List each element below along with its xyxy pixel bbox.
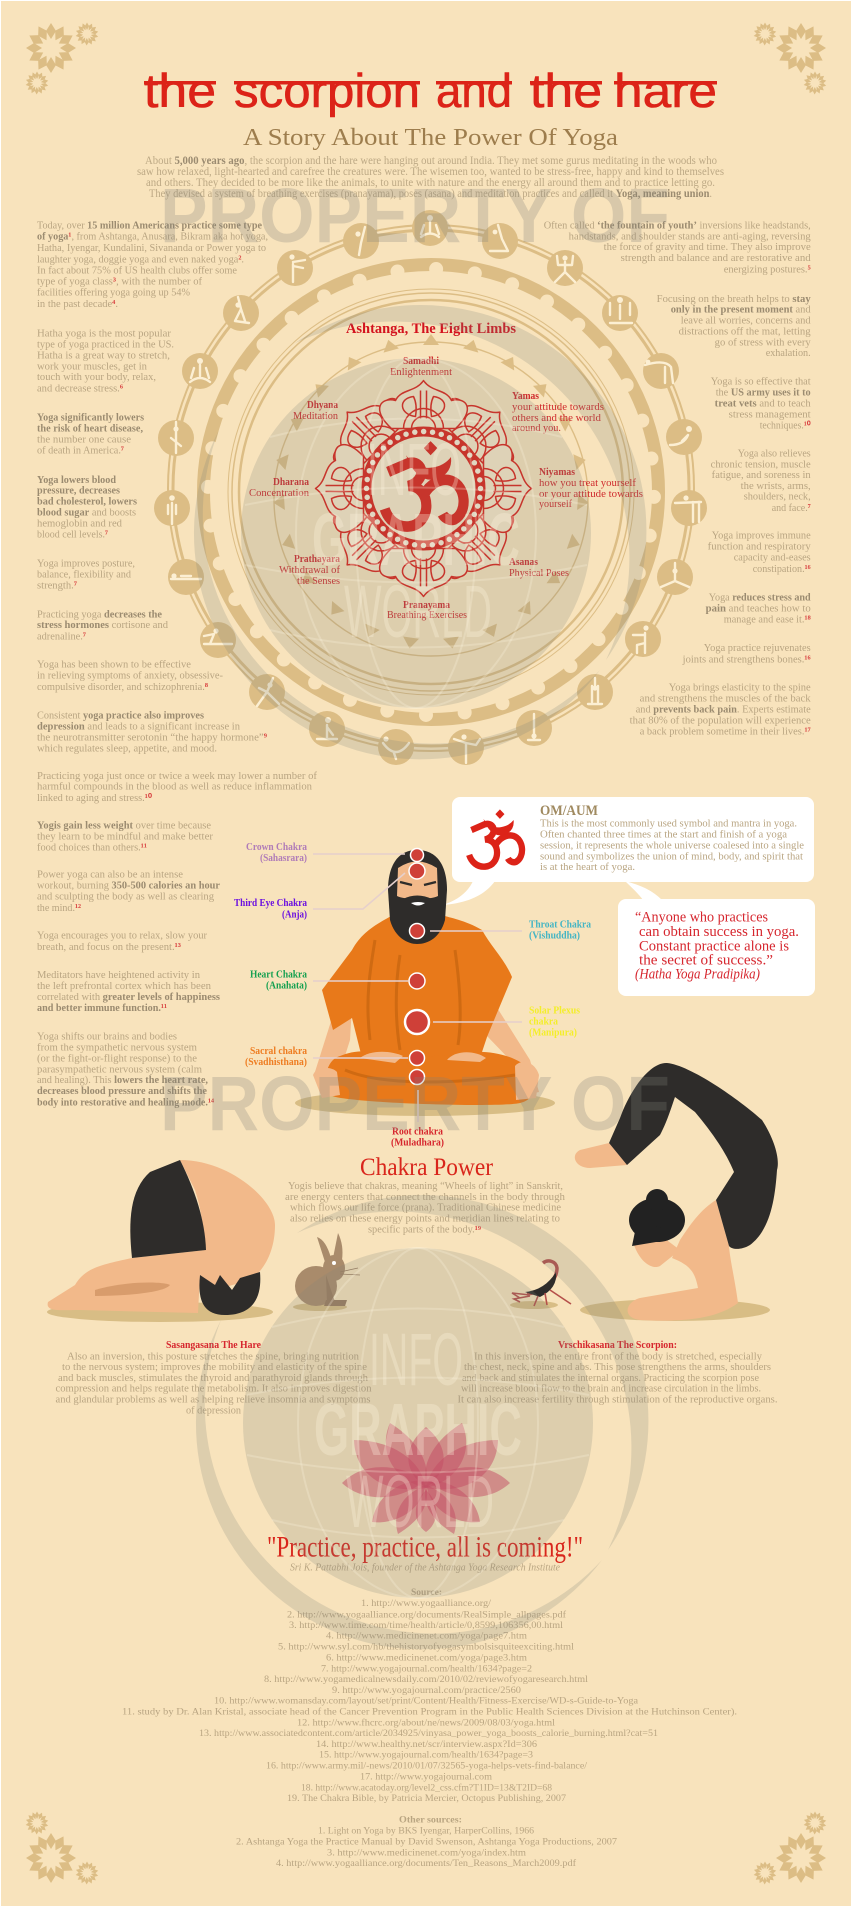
other sources list xyxy=(236,1815,617,1869)
right column: facts: energizing postures.⁵ xyxy=(724,264,811,275)
chakra labels: Heart Chakra xyxy=(250,969,308,980)
icon: corner flowers bottom right xyxy=(753,1812,827,1885)
right column: facts: joints and strengthens bones.¹⁶ xyxy=(682,655,811,666)
callout: hatha yoga quote: “Anyone who practices xyxy=(635,910,768,926)
left column: facts: Yoga improves posture, xyxy=(37,559,135,570)
left column: facts: bad cholesterol, lowers xyxy=(37,497,137,508)
right column: facts: distractions off the mat, letting xyxy=(679,326,811,337)
left column: facts: Yoga lowers blood xyxy=(37,475,116,486)
callout: hatha yoga quote xyxy=(618,881,815,996)
title xyxy=(144,64,717,117)
sources list: 5. http://www.syl.com/hb/thehistoryofyogasymbolsisquiteexciting.html xyxy=(278,1642,574,1653)
right column: facts: Yoga reduces stress and xyxy=(709,592,811,603)
sources list: 7. http://www.yogajournal.com/health/1634?page=2 xyxy=(321,1663,532,1674)
chakra labels: Solar Plexus xyxy=(529,1006,580,1017)
title: scorpion xyxy=(234,64,420,117)
sources list: 4. http://www.medicinenet.com/yoga/page7.htm xyxy=(326,1631,527,1642)
callout: hatha yoga quote: the secret of success.” xyxy=(639,952,773,968)
left column: facts: Today, over 15 million Americans practice some type xyxy=(37,221,262,232)
watermark: lower: INFO xyxy=(369,1318,463,1401)
watermark: upper: GRAPHIC xyxy=(312,498,520,581)
sources list: 19. The Chakra Bible, by Patricia Mercier, Octopus Publishing, 2007 xyxy=(287,1793,566,1804)
labels: eight limbs: Niyamas xyxy=(539,467,575,478)
chakra labels: (Manipura) xyxy=(529,1028,577,1039)
chakra labels: Third Eye Chakra xyxy=(234,898,308,909)
left column: facts xyxy=(37,221,317,1109)
icon: lotus flower xyxy=(342,1423,510,1534)
left column: facts: workout, burning 350-500 calories an hour xyxy=(37,881,220,892)
chakra labels: Sacral chakra xyxy=(250,1046,308,1057)
callout: om speech bubble: session, it represents the whole universe coalesed into a single xyxy=(540,840,804,851)
caption: scorpion pose xyxy=(458,1340,778,1406)
other sources list: 3. http://www.medicinenet.com/yoga/index.htm xyxy=(327,1847,526,1858)
sources list: 16. http://www.army.mil/-news/2010/01/07/32565-yoga-helps-vets-find-balance/ xyxy=(266,1761,587,1772)
chakra labels: Root chakra xyxy=(392,1127,444,1138)
labels: eight limbs: Pranayama xyxy=(403,600,451,611)
sources list: 17. http://www.yogajournal.com xyxy=(360,1772,492,1783)
chakra leader lines xyxy=(313,854,522,1122)
left column: facts: hemoglobin and red xyxy=(37,519,123,530)
labels: eight limbs: the Senses xyxy=(297,576,340,587)
left column: facts: facilities offering yoga going up 54% xyxy=(37,288,190,299)
chakra labels: Throat Chakra xyxy=(529,920,592,931)
mandala with om xyxy=(316,380,532,596)
left column: facts: of death in America.⁷ xyxy=(37,446,124,457)
icon: corner flowers bottom left xyxy=(25,1812,99,1885)
right column: facts: Yoga practice rejuvenates xyxy=(704,643,811,654)
other sources list: 4. http://www.yogaalliance.org/documents/Ten_Reasons_March2009.pdf xyxy=(276,1858,577,1869)
text block: chakra power: which flows our life force (prana). Traditional Chinese medicine xyxy=(290,1203,562,1214)
left column: facts: they learn to be mindful and make better xyxy=(37,831,214,842)
chakra labels: (Anahata) xyxy=(266,980,307,991)
left column: facts: blood sugar and boosts xyxy=(37,508,136,519)
left column: facts: stress hormones cortisone and xyxy=(37,620,169,631)
right column: facts: a back problem sometime in their lives.¹⁷ xyxy=(640,727,811,738)
sources list: 11. study by Dr. Alan Kristal, associate head of the Cancer Prevention Program in the Public Health Sciences Division at the Hutchinson Center). xyxy=(122,1706,737,1717)
illustration: scorpion xyxy=(510,1261,571,1309)
right column: facts: Often called ‘the fountain of youth’ inversions like headstands, xyxy=(544,221,811,232)
watermark: upper: WORLD xyxy=(344,570,492,653)
left column: facts: which regulates sleep, appetite, and mood. xyxy=(37,744,217,755)
left column: facts: adrenaline.⁷ xyxy=(37,631,86,642)
illustration: rabbit xyxy=(293,1233,360,1311)
watermark: upper xyxy=(160,173,670,759)
right column: facts: the force of gravity and time. They also improve xyxy=(604,242,811,253)
text block: chakra power: specific parts of the body. ¹⁹ xyxy=(368,1225,481,1236)
caption: hare pose: Sasangasana The Hare xyxy=(166,1340,261,1351)
left column: facts: balance, flexibility and xyxy=(37,569,132,580)
sources list: 9. http://www.yogajournal.com/practice/2560 xyxy=(332,1685,521,1696)
right column: facts: fatigue, and soreness in xyxy=(712,470,811,481)
labels: eight limbs: Withdrawal of xyxy=(279,565,341,576)
title: the xyxy=(144,64,216,117)
labels: eight limbs: yourself xyxy=(539,499,572,510)
left column: facts: laughter yoga, doggie yoga and even naked yoga². xyxy=(37,254,244,265)
chakra labels: chakra xyxy=(529,1016,559,1027)
callout: hatha yoga quote: can obtain success in yoga. xyxy=(639,924,799,940)
sources list: 14. http://www.healthy.net/scr/interview.aspx?Id=306 xyxy=(316,1739,537,1750)
callout: om speech bubble: Often chanted three times at the start and finish of a yoga xyxy=(540,829,787,840)
right column: facts: manage and ease it.¹⁸ xyxy=(724,615,811,626)
left column: facts: In fact about 75% of US health clubs offer some xyxy=(37,265,237,276)
callout: hatha yoga quote: (Hatha Yoga Pradipika) xyxy=(635,967,760,983)
text block: chakra power: Yogis believe that chakras, meaning “Wheels of light” in Sanskrit, xyxy=(288,1181,563,1192)
other sources list: 1. Light on Yoga by BKS Iyengar, HarperCollins, 1966 xyxy=(318,1826,534,1837)
left column: facts: Practicing yoga just once or twice a week may lower a number of xyxy=(37,771,317,782)
right column: facts: and prevents back pain. Experts estimate xyxy=(636,705,811,716)
left column: facts: strength.⁷ xyxy=(37,581,77,592)
right column: facts: handstands, and shoulder stands are anti-aging, reversing xyxy=(569,231,811,242)
left column: facts: Power yoga can also be an intense xyxy=(37,870,183,881)
left column: facts: and healing). This lowers the heart rate, xyxy=(37,1075,208,1086)
caption: hare pose: and glandular problems as well as helping relieve insomnia and symptoms xyxy=(56,1395,371,1406)
icon: corner flowers top right xyxy=(753,22,827,95)
right column: facts: and face.⁷ xyxy=(772,503,811,514)
right column: facts: pain and teaches how to xyxy=(706,603,811,614)
quote attribution: Sri K. Pattabhi Jois, founder of the Ashtanga Yoga Research Institute xyxy=(290,1563,561,1574)
left column: facts: the neurotransmitter serotonin “the happy hormone” ⁹ xyxy=(37,733,267,744)
left column: facts: pressure, decreases xyxy=(37,486,120,497)
callout: om speech bubble xyxy=(443,797,814,905)
left column: facts: body into restorative and healing mode.¹⁴ xyxy=(37,1098,215,1109)
labels: eight limbs: Meditation xyxy=(293,411,339,422)
left column: facts: Yoga encourages you to relax, slow your xyxy=(37,931,207,942)
labels: eight limbs: Yamas xyxy=(512,391,539,402)
left column: facts: breath, and focus on the present.¹³ xyxy=(37,942,181,953)
left column: facts: Hatha, Iyengar, Kundalini, Sivananda or Power yoga to xyxy=(37,243,266,254)
chakra labels: (Muladhara) xyxy=(391,1137,444,1148)
right column: facts: shoulders, neck, xyxy=(744,492,811,503)
other sources list: 2. Ashtanga Yoga the Practice Manual by David Swenson, Ashtanga Yoga Productions, 2007 xyxy=(236,1836,617,1847)
icon: om symbol xyxy=(469,809,522,867)
left column: facts: decreases blood pressure and shifts the xyxy=(37,1086,207,1097)
left column: facts: in the past decade⁴. xyxy=(37,299,118,310)
left column: facts: Consistent yoga practice also improves xyxy=(37,711,204,722)
left column: facts: Meditators have heightened activity in xyxy=(37,970,201,981)
left column: facts: the number one cause xyxy=(37,435,131,446)
left column: facts: in relieving symptoms of anxiety, obsessive- xyxy=(37,670,223,681)
left column: facts: linked to aging and stress.¹⁰ xyxy=(37,792,153,804)
right column: facts: capacity and-eases xyxy=(734,553,811,564)
watermark: upper: INFO xyxy=(367,428,461,511)
title: and xyxy=(436,64,512,117)
left column: facts: parasympathetic nervous system (calm xyxy=(37,1064,202,1075)
sources list: 18. http://www.acatoday.org/level2_css.cfm?T1ID=13&T2ID=68 xyxy=(301,1782,552,1793)
right column: facts: stress management xyxy=(729,409,811,420)
callout: om speech bubble: OM/AUM xyxy=(540,803,598,819)
labels: eight limbs: Asanas xyxy=(509,557,538,568)
right column: facts: Focusing on the breath helps to stay xyxy=(657,294,811,305)
left column: facts: food choices than others.¹¹ xyxy=(37,843,147,854)
left column: facts: and sculpting the body as well as clearing xyxy=(37,892,215,903)
right column: facts: Yoga brings elasticity to the spine xyxy=(669,683,811,694)
intro text block: and others. They decided to be more like the animals, to unite with nature and the energy all around them and to practice letting go. xyxy=(146,177,715,189)
heading: ashtanga eight limbs: Ashtanga, The Eight Limbs xyxy=(346,321,516,337)
illustration: meditating guru xyxy=(295,850,555,1116)
left column: facts: Hatha is a great way to stretch, xyxy=(37,350,170,361)
left column: facts: from the sympathetic nervous system xyxy=(37,1042,197,1053)
caption: hare pose: of depression xyxy=(186,1405,241,1416)
title: hare xyxy=(614,64,717,117)
sources list: 15. http://www.yogajournal.com/health/1634?page=3 xyxy=(319,1750,533,1761)
watermark: lower xyxy=(160,1061,670,1649)
caption: scorpion pose: and back and stimulates the internal organs. Practicing the scorpion pose xyxy=(462,1373,760,1384)
watermark: lower: GRAPHIC xyxy=(314,1388,522,1471)
title: the xyxy=(530,64,602,117)
subtitle: A Story About The Power Of Yoga xyxy=(243,125,618,151)
right column: facts: the wrists, arms, xyxy=(741,481,811,492)
right column: facts: and strengthens the muscles of the back xyxy=(640,693,811,704)
sources list: Source: xyxy=(411,1587,442,1598)
labels: eight limbs: Concentration xyxy=(249,488,310,499)
left column: facts: work your muscles, get in xyxy=(37,361,148,372)
labels: eight limbs: or your attitude towards xyxy=(539,489,643,500)
right column: facts: techniques.¹⁰ xyxy=(760,420,811,432)
ring diagram: triangle ring xyxy=(273,334,589,650)
chakra labels: (Vishuddha) xyxy=(529,931,580,942)
left column: facts: type of yoga class³, with the number of xyxy=(37,277,202,288)
text block: chakra power: are energy centers that connect the channels in the body through xyxy=(285,1192,565,1203)
callout: om speech bubble: This is the most commonly used symbol and mantra in yoga. xyxy=(540,819,797,830)
labels: eight limbs: others and the world xyxy=(512,413,602,424)
right column: facts: strength and balance and are restorative and xyxy=(621,253,811,264)
left column: facts: touch with your body, relax, xyxy=(37,372,156,383)
right column: facts: leave all worries, concerns and xyxy=(681,315,811,326)
caption: hare pose: to the nervous system; improves the mobility and elasticity of the spine xyxy=(62,1362,368,1373)
sources list: 10. http://www.womansday.com/layout/set/print/Content/Health/Fitness-Exercise/WD-s-Guide-to-Yoga xyxy=(214,1696,639,1707)
left column: facts: Yoga significantly lowers xyxy=(37,413,144,424)
labels: eight limbs: Enlightenment xyxy=(390,367,452,378)
caption: scorpion pose: the chest, neck, spine and abs. This pose strengthens the arms, shoulders xyxy=(464,1362,771,1373)
sources list xyxy=(122,1587,737,1804)
right column: facts: only in the present moment and xyxy=(671,305,811,316)
other sources list: Other sources: xyxy=(399,1815,462,1826)
quote: practice: "Practice, practice, all is coming!" xyxy=(267,1531,583,1564)
right column: facts: Yoga is so effective that xyxy=(711,377,811,388)
left column: facts: and decrease stress.⁶ xyxy=(37,383,123,394)
left column: facts: harmful compounds in the blood as well as reduce inflammation xyxy=(37,782,313,793)
labels: eight limbs: Dhyana xyxy=(307,400,339,411)
caption: hare pose: compression and helps regulate the metabolism. It also improves digestion xyxy=(56,1384,372,1395)
caption: scorpion pose: Vrschikasana The Scorpion: xyxy=(558,1340,677,1351)
left column: facts: correlated with greater levels of happiness xyxy=(37,992,220,1003)
labels: eight limbs: Breathing Exercises xyxy=(387,610,467,621)
right column: facts: chronic tension, muscle xyxy=(711,459,811,470)
left column: facts: and better immune function.¹¹ xyxy=(37,1003,167,1014)
text block: chakra power: also relies on these energy points and meridian lines relating to xyxy=(290,1214,560,1225)
labels: eight limbs xyxy=(249,356,643,621)
sources list: 13. http://www.associatedcontent.com/article/2034925/vinyasa_power_yoga_boosts_calorie_burning.html?cat=51 xyxy=(199,1728,658,1739)
intro text block: About 5,000 years ago, the scorpion and the hare were hanging out around India. They met some gurus meditating in the woods who xyxy=(145,155,717,167)
left column: facts: Yoga has been shown to be effective xyxy=(37,660,191,671)
chakra labels: Crown Chakra xyxy=(246,842,308,853)
left column: facts: compulsive disorder, and schizophrenia.⁸ xyxy=(37,682,208,693)
left column: facts: of yoga¹, from Ashtanga, Anusara, Bikram aka hot yoga, xyxy=(37,232,268,243)
sources list: 3. http://www.time.com/time/health/article/0,8599,106356,00.html xyxy=(289,1620,563,1631)
callout: hatha yoga quote: Constant practice alone is xyxy=(639,938,789,954)
left column: facts: blood cell levels.⁷ xyxy=(37,530,108,541)
intro text block: saw how relaxed, light-hearted and carefree the creatures were. The wisemen too, wanted to be stress-free, happy and kind to themselves xyxy=(137,166,724,178)
intro text block xyxy=(137,155,724,200)
caption: hare pose xyxy=(56,1340,372,1416)
labels: eight limbs: around you. xyxy=(512,423,561,434)
labels: eight limbs: your attitude towards xyxy=(512,402,604,413)
left column: facts: Yogis gain less weight over time because xyxy=(37,821,211,832)
icon: corner flowers top left xyxy=(25,22,99,95)
sources list: 1. http://www.yogaalliance.org/ xyxy=(361,1598,491,1609)
watermark: upper: PROPERTY OF xyxy=(160,173,670,259)
right column: facts: treat vets and to teach xyxy=(715,398,811,409)
chakra labels: (Svadhisthana) xyxy=(245,1057,307,1068)
intro text block: They devised a system of breathing exercises (pranayama), poses (asana) and meditation practices and called it Yoga, meaning union. xyxy=(149,188,712,200)
left column: facts: Hatha yoga is the most popular xyxy=(37,329,172,340)
right column: facts: function and respiratory xyxy=(708,542,811,553)
heading: chakra power: Chakra Power xyxy=(360,1154,494,1181)
right column: facts: that 80% of the population will experience xyxy=(630,715,811,726)
labels: eight limbs: Physical Poses xyxy=(509,568,569,579)
left column: facts: (or the fight-or-flight response) to the xyxy=(37,1053,197,1064)
left column: facts: depression and leads to a significant increase in xyxy=(37,721,241,732)
right column: facts: Yoga also relieves xyxy=(738,449,811,460)
labels: eight limbs: Samadhi xyxy=(403,356,439,367)
caption: hare pose: and back muscles, stimulates the thyroid and parathyroid glands through xyxy=(58,1373,368,1384)
right column: facts xyxy=(544,221,811,738)
chakra labels: (Anja) xyxy=(282,909,307,920)
left column: facts: the left prefrontal cortex which has been xyxy=(37,981,212,992)
right column: facts: Yoga improves immune xyxy=(712,531,811,542)
chakra labels xyxy=(234,842,592,1148)
illustration: scorpion pose woman xyxy=(575,1063,778,1321)
chakra labels: (Sahasrara) xyxy=(260,853,307,864)
caption: hare pose: Also an inversion, this posture stretches the spine, bringing nutrition xyxy=(67,1351,359,1362)
ring diagram: rings and notched band xyxy=(168,225,694,751)
labels: eight limbs: how you treat yourself xyxy=(539,478,637,489)
watermark: lower: PROPERTY OF xyxy=(160,1061,670,1147)
right column: facts: go of stress with every xyxy=(715,337,811,348)
illustration: hare pose man xyxy=(47,1160,275,1322)
labels: eight limbs: Dharana xyxy=(273,477,310,488)
chakra points on body xyxy=(405,848,429,1084)
icons: ring of yoga poses xyxy=(154,210,707,765)
sources list: 6. http://www.medicinenet.com/yoga/page3.htm xyxy=(326,1653,527,1664)
left column: facts: Yoga shifts our brains and bodies xyxy=(37,1032,177,1043)
callout: om speech bubble: sound and symbolizes the union of mind, body, and spirit that xyxy=(540,851,803,862)
callout: om speech bubble: is at the heart of yoga. xyxy=(540,862,635,873)
caption: scorpion pose: will increase blood flow to the brain and increase circulation in the limbs. xyxy=(461,1384,761,1395)
right column: facts: the US army uses it to xyxy=(716,387,811,398)
left column: facts: Practicing yoga decreases the xyxy=(37,609,162,620)
right column: facts: constipation.¹⁶ xyxy=(753,564,811,575)
sources list: 8. http://www.yogamedicalnewsdaily.com/2010/02/reviewofyogaresearch.html xyxy=(264,1674,588,1685)
caption: scorpion pose: In this inversion, the entire front of the body is stretched, especially xyxy=(474,1351,762,1362)
left column: facts: the mind.¹² xyxy=(37,903,81,914)
left column: facts: type of yoga practiced in the US. xyxy=(37,339,174,350)
caption: scorpion pose: It can also increase fertility through stimulation of the reproductive organs. xyxy=(458,1395,778,1406)
sources list: 2. http://www.yogaalliance.org/documents/RealSimple_allpages.pdf xyxy=(287,1609,567,1620)
right column: facts: exhalation. xyxy=(766,348,811,359)
sources list: 12. http://www.fhcrc.org/about/ne/news/2009/08/03/yoga.html xyxy=(297,1717,555,1728)
left column: facts: the risk of heart disease, xyxy=(37,423,143,434)
labels: eight limbs: Prathayara xyxy=(294,554,341,565)
watermark: lower: WORLD xyxy=(346,1460,494,1543)
text block: chakra power xyxy=(285,1181,565,1236)
